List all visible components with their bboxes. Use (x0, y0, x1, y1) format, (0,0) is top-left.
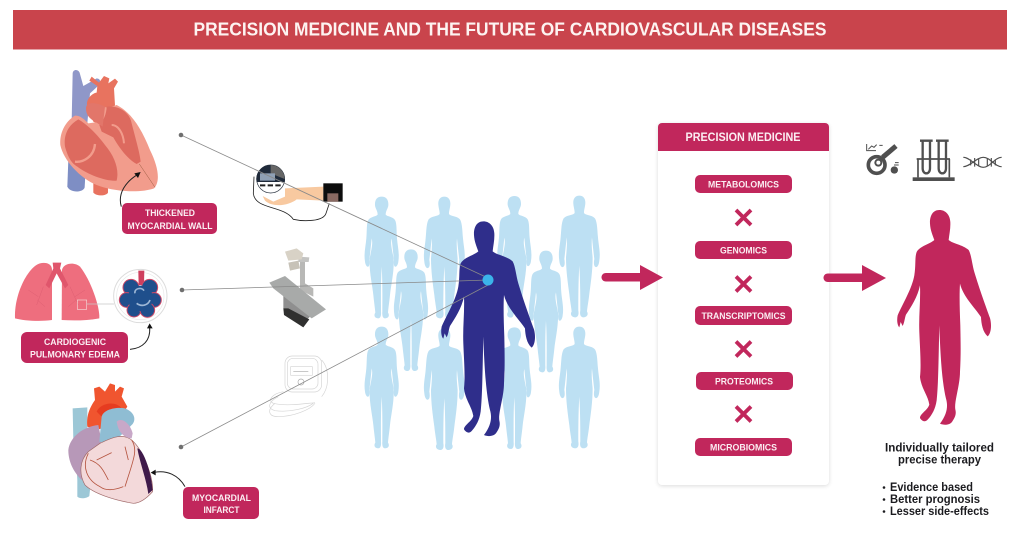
icon: test tubes in rack (913, 141, 955, 181)
label: cardiogenic pulmonary edema (21, 332, 128, 363)
icon: DNA helix (963, 157, 1002, 167)
panel heading (658, 123, 829, 151)
title banner: PRECISION MEDICINE AND THE FUTURE OF CARDIOVASCULAR DISEASES (194, 18, 826, 40)
pill: genomics: GENOMICS (720, 246, 767, 256)
label: thickened myocardial wall: MYOCARDIAL WALL (128, 221, 213, 232)
text: benefits list: Lesser side-effects (890, 506, 989, 518)
pill: transcriptomics (695, 306, 792, 325)
label: myocardial infarct: MYOCARDIAL (192, 493, 251, 504)
label: thickened myocardial wall: THICKENED (145, 208, 195, 219)
label: myocardial infarct: INFARCT (204, 505, 240, 516)
label: myocardial infarct (183, 487, 259, 519)
text: benefits list: Better prognosis (890, 494, 980, 506)
icon: heart with infarct (68, 383, 153, 503)
label: cardiogenic pulmonary edema: CARDIOGENIC (44, 337, 106, 348)
pill: metabolomics (695, 175, 792, 193)
icon: blood pressure monitor on arm (253, 165, 343, 221)
pill: genomics (695, 241, 792, 259)
multiply sign (736, 210, 751, 225)
treated patient figure (897, 210, 991, 425)
pill: metabolomics: METABOLOMICS (708, 180, 779, 190)
individual patient figure (441, 221, 535, 436)
arrow: patient to precision medicine (602, 265, 663, 290)
pill: proteomics (696, 372, 793, 390)
icon: microscope and chart (867, 144, 899, 174)
crowd of patients (365, 196, 600, 450)
connector lines to patient (179, 133, 488, 449)
text: individually tailored therapy: precise therapy (898, 454, 982, 466)
label: cardiogenic pulmonary edema: PULMONARY EDEMA (30, 350, 120, 360)
arrow: infarct pointer (151, 470, 185, 487)
panel heading: PRECISION MEDICINE (686, 132, 801, 144)
icon: lungs with alveolus magnified (15, 263, 167, 323)
text: individually tailored therapy (885, 442, 994, 466)
text: benefits list (883, 482, 989, 518)
multiply sign (736, 342, 751, 356)
multiply sign (736, 406, 751, 422)
arrow: precision medicine to therapy (824, 265, 886, 291)
icon: x-ray table (269, 248, 326, 327)
icon: implanted pacemaker outline (270, 356, 328, 417)
title banner (13, 10, 1007, 50)
text: benefits list: Evidence based (890, 482, 973, 494)
pill: proteomics: PROTEOMICS (715, 376, 773, 388)
arrow: edema pointer (130, 323, 153, 349)
multiply sign (736, 276, 751, 292)
panel: precision medicine (658, 123, 829, 486)
text: individually tailored therapy: Individually tailored (885, 442, 994, 454)
pill: transcriptomics: TRANSCRIPTOMICS (702, 311, 786, 322)
pill: microbiomics (695, 438, 792, 456)
pill: microbiomics: MICROBIOMICS (710, 442, 777, 454)
icon: heart with thickened wall (60, 70, 158, 195)
arrow: thickened wall pointer (120, 172, 141, 207)
marker: heart location dot (482, 274, 494, 286)
label: thickened myocardial wall (122, 203, 217, 234)
